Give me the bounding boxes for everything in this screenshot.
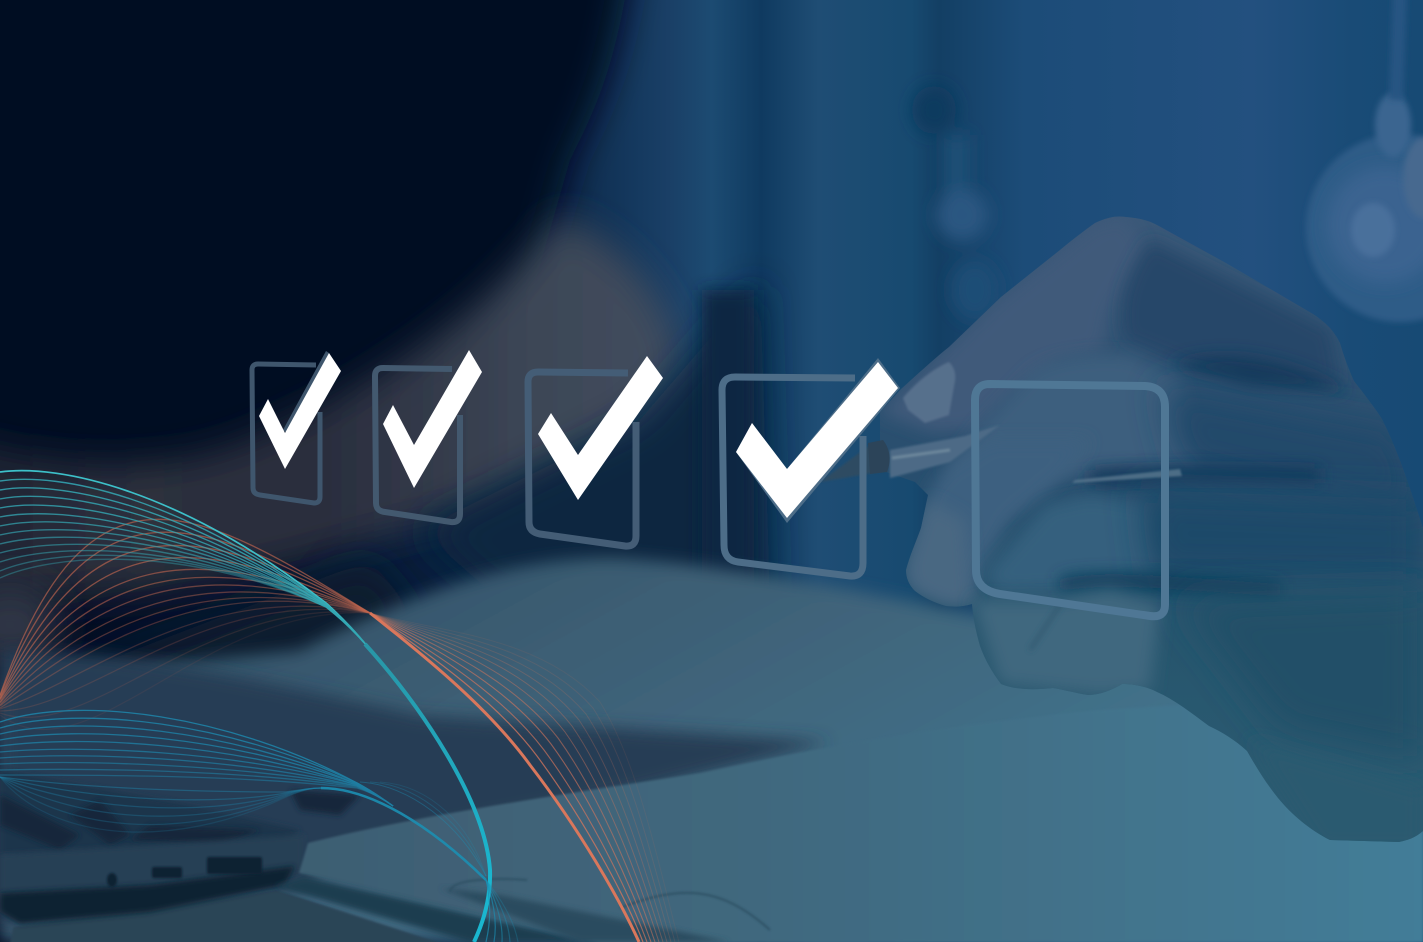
notebook dark band bbox=[440, 888, 730, 942]
check mark bbox=[538, 356, 663, 500]
check mark bbox=[259, 353, 341, 469]
laptop side bbox=[0, 835, 303, 900]
laptop shadow bbox=[0, 650, 830, 925]
lower valley bbox=[1060, 574, 1280, 597]
stethoscope bbox=[1306, 0, 1423, 322]
wave lines: orange right fan bbox=[370, 613, 679, 942]
wave lines: orange upper-left fan bbox=[0, 519, 370, 729]
back of index finger bbox=[1122, 242, 1333, 372]
paper bbox=[299, 690, 1423, 942]
notebook edge shadow bbox=[275, 877, 590, 942]
fourth finger dark end bbox=[1126, 497, 1415, 574]
box outline bbox=[252, 364, 320, 503]
second finger bbox=[956, 356, 1186, 480]
index finger bbox=[887, 233, 1132, 434]
nail bbox=[903, 362, 955, 423]
laptop lower edge bbox=[0, 866, 295, 924]
pen behind box bbox=[1072, 469, 1182, 483]
hand base bbox=[870, 200, 1423, 860]
box outline bbox=[528, 372, 636, 546]
pen stripe bbox=[892, 450, 950, 458]
laptop keyboard bbox=[0, 770, 300, 855]
shadow under arm bbox=[420, 280, 770, 600]
check mark shadow bbox=[283, 351, 329, 433]
wave lines: blue tail bbox=[321, 782, 518, 942]
paper clip bbox=[450, 879, 770, 930]
second finger dark end bbox=[1156, 383, 1389, 464]
hand holding pen bbox=[820, 200, 1423, 860]
laptop ports bbox=[107, 857, 262, 887]
wave line: bright teal main curve bbox=[365, 644, 490, 942]
dark band below arm bbox=[30, 560, 420, 700]
pen tip behind fingers bbox=[820, 440, 890, 482]
hand layers clipped to silhouette bbox=[870, 200, 1423, 860]
thumb-side tip bbox=[906, 500, 972, 606]
checkbox 1 bbox=[252, 351, 341, 503]
wave lines: blue fan bbox=[0, 710, 393, 832]
check mark bbox=[383, 350, 482, 488]
box outline bbox=[375, 368, 460, 522]
pen barrel bbox=[890, 425, 1000, 478]
checkbox 5: empty bbox=[975, 384, 1165, 616]
heel of palm bbox=[1338, 837, 1414, 842]
fourth finger bbox=[991, 494, 1149, 590]
stethoscope tube faint bbox=[912, 86, 999, 320]
pen-line valley bbox=[1090, 467, 1320, 486]
keys bbox=[0, 790, 360, 850]
pen ferrule bbox=[868, 440, 890, 474]
table bbox=[0, 558, 1423, 942]
checkbox 4 bbox=[722, 358, 900, 576]
checkbox 2 bbox=[375, 350, 482, 522]
pinky crease bbox=[1032, 613, 1056, 647]
gap between fingers bbox=[1100, 338, 1150, 356]
valley between fingers bbox=[1170, 356, 1350, 392]
palm bbox=[1229, 594, 1410, 743]
dark vertical band bbox=[702, 290, 754, 605]
box outline bbox=[722, 377, 863, 576]
dark left backdrop bbox=[0, 0, 640, 640]
check mark shadow bbox=[736, 358, 900, 523]
third finger bbox=[926, 470, 1043, 585]
wave lines: teal fan bbox=[0, 471, 372, 652]
lobe by left edge bbox=[0, 580, 60, 670]
checkbox 3 bbox=[528, 356, 663, 546]
forearm bbox=[0, 218, 680, 600]
bottom table left bbox=[10, 890, 446, 942]
pinky bbox=[972, 590, 1160, 695]
check mark bbox=[736, 362, 898, 518]
